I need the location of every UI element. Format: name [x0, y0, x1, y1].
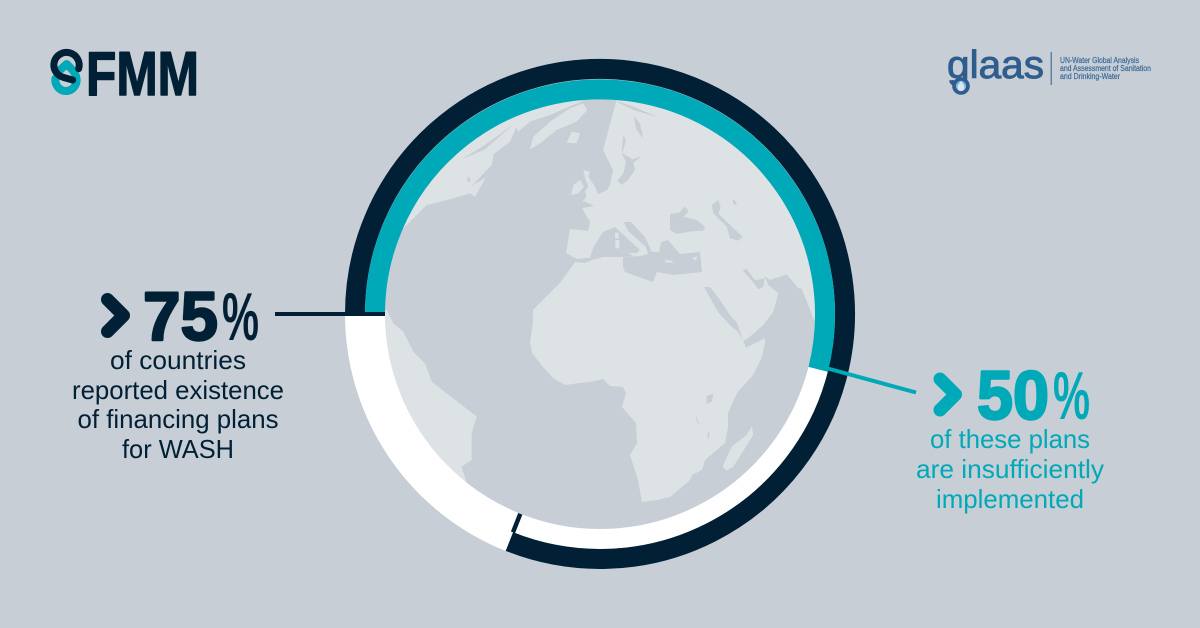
donut ring chart	[355, 69, 845, 559]
arctic inlets	[462, 125, 513, 182]
callout description	[72, 345, 284, 464]
infographic canvas	[50, 48, 1151, 569]
stat value: 50	[977, 357, 1049, 434]
logo descriptor text: and Drinking-Water	[1060, 72, 1120, 81]
callout: 75%	[72, 278, 284, 464]
globe map	[360, 50, 900, 502]
callout description: reported existence	[72, 375, 284, 405]
callout description: of financing plans	[78, 404, 278, 434]
callout: 50%	[916, 357, 1104, 514]
icon: water drop in g	[954, 79, 968, 93]
stat percent sign: %	[222, 279, 259, 355]
callout description: implemented	[936, 484, 1084, 514]
callout description: of these plans	[930, 424, 1090, 454]
logo descriptor text: UN-Water Global Analysis	[1060, 56, 1139, 65]
icon: chevron greater-than	[940, 379, 956, 410]
land: Africa and Eurasia	[530, 100, 815, 502]
ring divider	[513, 514, 520, 532]
ring segment: sufficiently implemented (white)	[517, 369, 818, 539]
callout description	[916, 424, 1104, 514]
land: islands and Mediterranean highlights	[360, 90, 753, 483]
callout description: are insufficiently	[916, 454, 1104, 484]
logo wordmark glaas: glaas	[947, 44, 1044, 87]
callout description: of countries	[110, 345, 246, 375]
ring segment: 75% financing plans (navy)	[355, 69, 845, 559]
ring segment: 50% insufficiently implemented (teal)	[375, 89, 825, 369]
logo descriptor text	[1060, 56, 1151, 81]
leader line: 75%	[275, 312, 385, 316]
ring segment: no financing plans (white)	[365, 314, 513, 532]
seas cut into land	[575, 100, 830, 441]
logo wordmark: FMM	[86, 40, 199, 109]
stat value: 75	[143, 278, 218, 355]
logo descriptor text: and Assessment of Sanitation	[1060, 64, 1151, 73]
stat percent sign: %	[1053, 358, 1090, 434]
icon: chevron greater-than	[108, 300, 124, 332]
leader line: 50%	[826, 368, 916, 392]
icon: SFMM drop mark	[54, 52, 79, 91]
logo: GLAAS	[947, 44, 1151, 93]
logo: SFMM	[54, 40, 199, 109]
callout description: for WASH	[122, 434, 234, 464]
